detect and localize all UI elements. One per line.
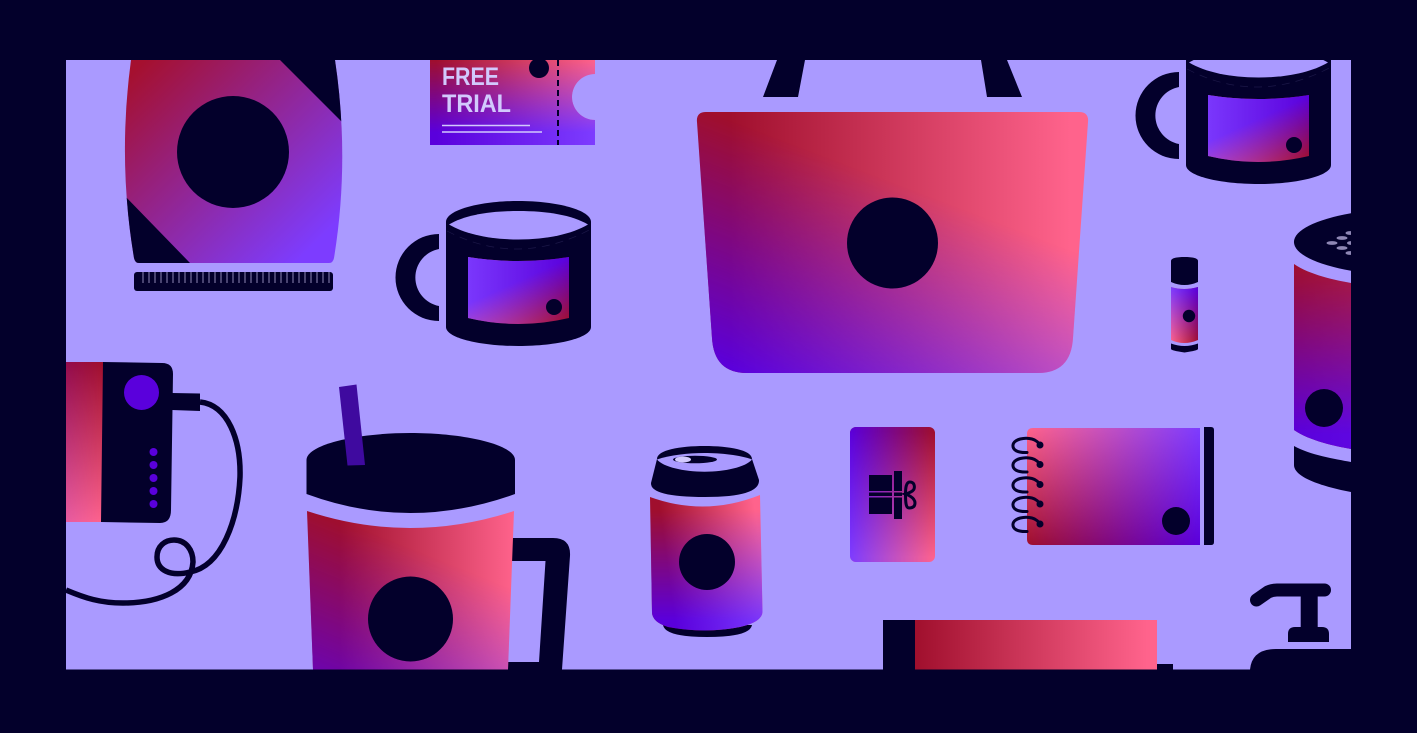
soda can <box>650 446 762 637</box>
ticket text: TRIAL <box>442 90 511 118</box>
panel: lilac product field <box>66 60 1351 670</box>
ticket text: FREE <box>442 63 499 91</box>
gift card <box>850 427 935 562</box>
panel contents: products <box>66 49 1355 670</box>
mug: centre <box>396 201 591 346</box>
bottom box <box>883 620 1173 670</box>
mug: top right <box>1136 49 1331 184</box>
cylinder vents <box>1326 231 1351 255</box>
spiral notebook <box>1013 427 1214 545</box>
spiral rings <box>1013 438 1040 532</box>
lip balm <box>1171 257 1198 352</box>
large cylinder <box>1294 213 1355 492</box>
pillow with comb base <box>122 60 345 291</box>
tumbler with straw <box>306 384 570 670</box>
free trial ticket <box>430 58 595 145</box>
power bank with cable <box>66 362 240 603</box>
ring ends <box>1036 442 1044 528</box>
soap pump <box>1250 590 1351 670</box>
tote bag <box>697 60 1088 373</box>
gift icon <box>869 471 915 519</box>
ticket lines <box>442 126 542 132</box>
